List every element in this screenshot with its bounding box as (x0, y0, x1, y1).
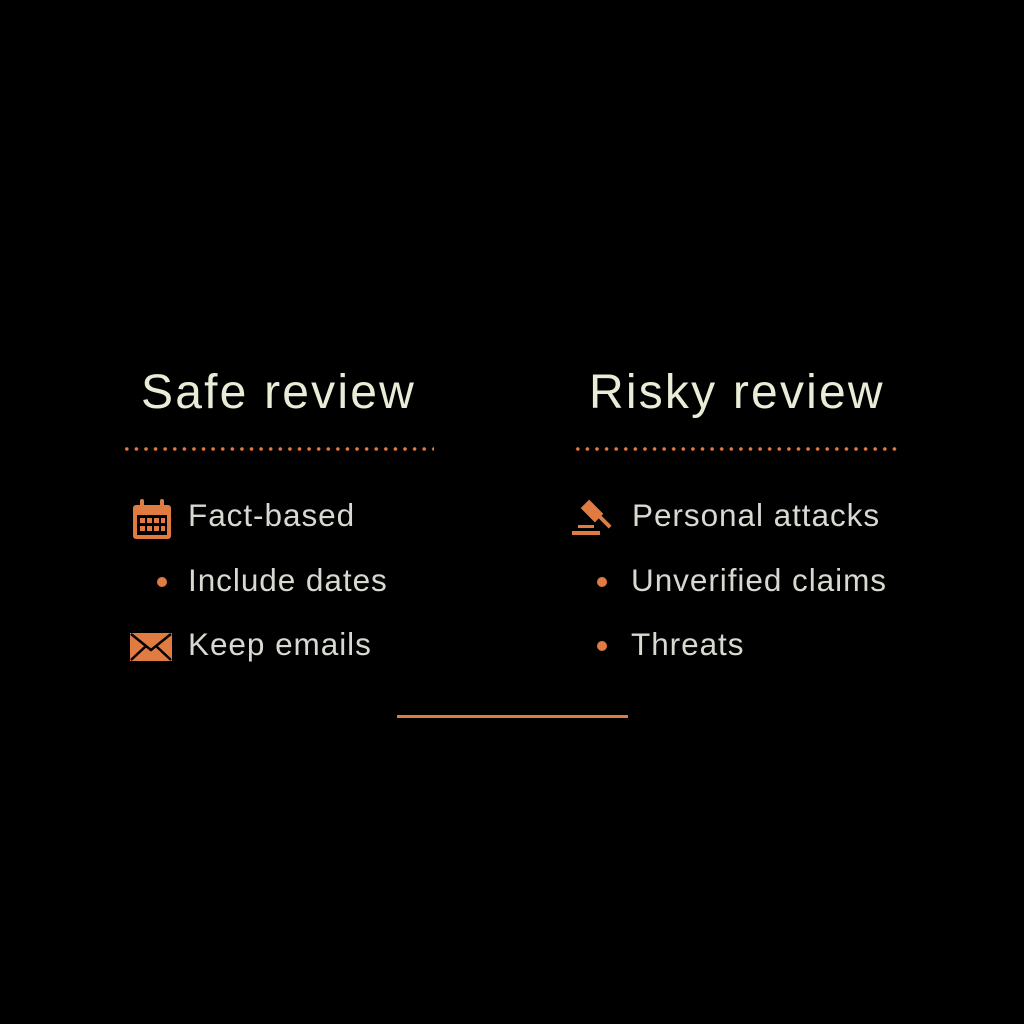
icon: envelope (130, 633, 172, 661)
bullet (597, 641, 607, 651)
text: threats: Threats (631, 626, 744, 662)
text: personal attacks: Personal attacks (632, 497, 880, 533)
icon: calendar (133, 499, 171, 539)
bullet (157, 577, 167, 587)
text: fact-based: Fact-based (188, 497, 355, 533)
bullet (597, 577, 607, 587)
panel: safe items (130, 497, 388, 662)
icon: gavel (572, 500, 612, 535)
text: unverified claims: Unverified claims (631, 562, 887, 598)
title: safe review: Safe review (141, 366, 416, 419)
bottom rule (397, 715, 628, 718)
text: keep emails: Keep emails (188, 626, 372, 662)
text: include dates: Include dates (188, 562, 388, 598)
panel: risky items (572, 497, 887, 662)
title: risky review: Risky review (589, 366, 885, 419)
